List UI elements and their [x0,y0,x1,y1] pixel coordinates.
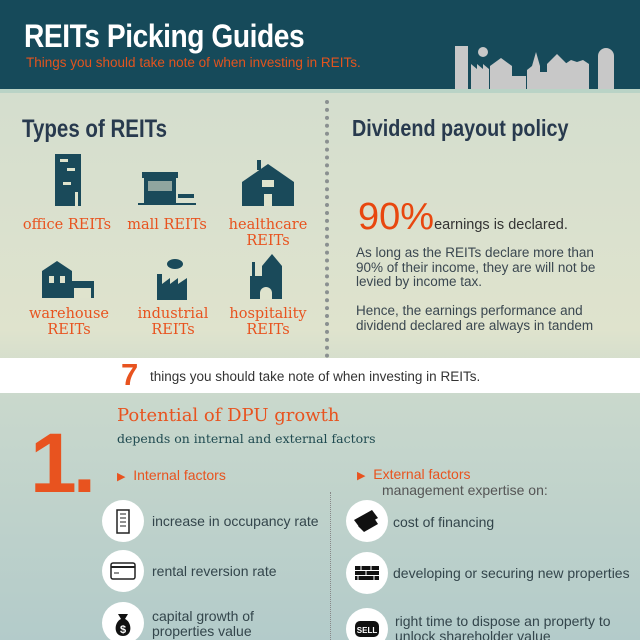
text: cost of financing [393,514,494,530]
heading: dividend payout policy: Dividend payout policy [352,115,569,141]
text: healthcare [229,217,307,233]
heading: types of REITs: Types of REITs [22,115,167,143]
text: right time to dispose an property to [395,613,611,629]
text: SELL [357,626,377,635]
band: 7 things: 7 [121,357,138,392]
text: industrial [138,306,208,322]
external items [346,500,388,542]
text: REITs [246,233,290,249]
title: REITs Picking Guides [24,18,304,54]
external factors heading: management expertise on: [382,482,548,498]
text: REITs [151,322,195,338]
icon: mall [138,172,196,205]
header [0,0,640,89]
text: developing or securing new properties [393,565,630,581]
icon: skyline [455,46,614,89]
text: increase in occupancy rate [152,513,319,529]
text: rental reversion rate [152,563,277,579]
internal factors heading: ▶ Internal factors [117,467,226,483]
icon: office [55,154,81,206]
text: REITs [246,322,290,338]
text: dividend explanation: As long as the REITs declare more than 90% of their income, they are will not be levied by income tax. [356,245,595,289]
number 1: 1. [30,416,92,510]
text: dividend explanation: Hence, the earnings performance and dividend declared are always in tandem [356,303,593,332]
subtitle: Things you should take note of when investing in REITs. [26,55,361,70]
icon: industrial [157,259,187,300]
band: 7 things: things you should take note of when investing in REITs. [150,369,480,384]
text: dividend explanation [356,245,595,333]
text: warehouse [29,306,109,322]
text: mall REITs [127,217,207,233]
text: REITs [47,322,91,338]
stat 90%: 90%earnings is declared. [358,196,568,238]
internal items [102,500,144,542]
text: $ [120,624,126,636]
text: properties value [152,623,252,639]
text: depends on internal and external factors [117,431,376,446]
heading: potential of DPU growth: Potential of DPU growth [117,405,339,426]
external factors heading: ▶ External factors [357,466,471,482]
icon: healthcare [242,160,294,206]
divider dotted [325,100,329,358]
external factors heading [357,466,548,498]
text: office REITs [23,217,111,233]
text: capital growth of [152,608,254,624]
text: hospitality [229,306,307,322]
band: 7 things [0,358,640,393]
icon: warehouse [42,261,94,298]
icon: hospitality [250,254,282,299]
